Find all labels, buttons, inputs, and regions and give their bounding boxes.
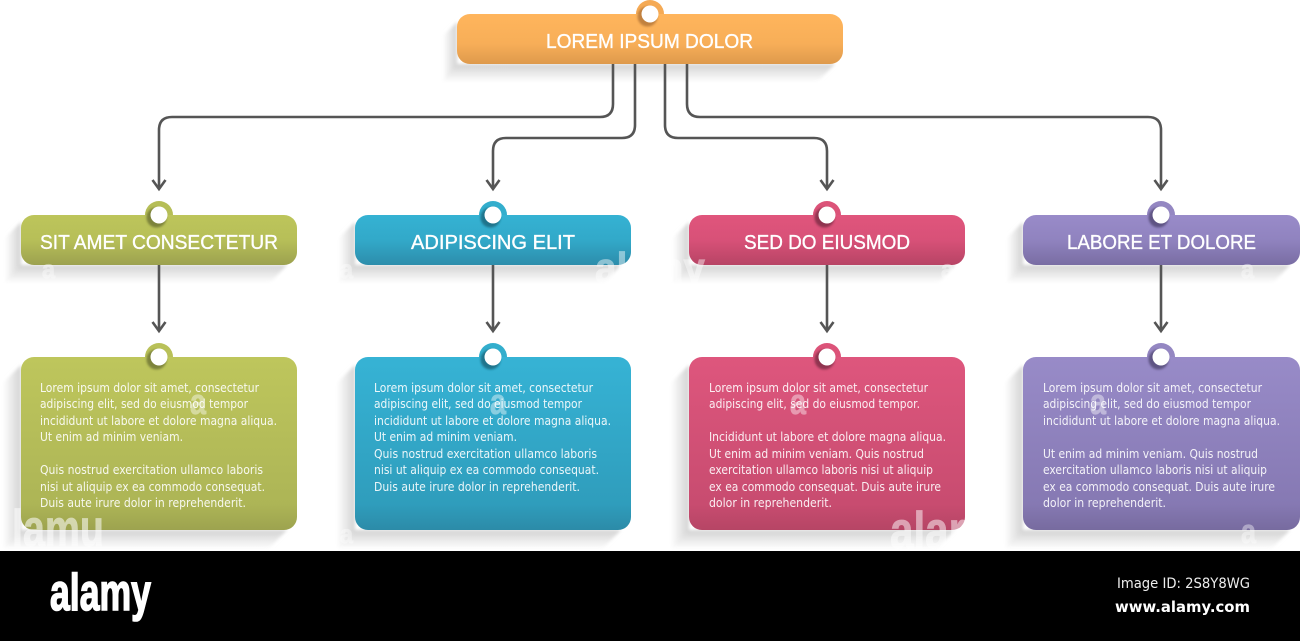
icon: pin purple body: [1148, 348, 1170, 370]
text: blue body: Lorem ipsum dolor sit amet, consectetur: [374, 381, 593, 395]
text: green body: [40, 381, 277, 510]
watermark overlay: a: [1241, 254, 1254, 284]
text: blue body: adipiscing elit, sed do eiusmod tempor: [374, 397, 582, 411]
footer logo: alamy: [50, 564, 151, 622]
text: blue body: [374, 381, 611, 494]
watermark overlay: alamy: [595, 244, 706, 291]
text: purple body: Ut enim ad minim veniam. Quis nostrud: [1043, 447, 1258, 461]
text: green body: Lorem ipsum dolor sit amet, consectetur: [40, 381, 259, 395]
image id: Image ID: 2S8Y8WG: [1117, 576, 1250, 592]
watermark overlay: lamu: [12, 500, 104, 558]
text: purple body: incididunt ut labore et dolore magna aliqua.: [1043, 414, 1280, 428]
heading: green: SIT AMET CONSECTETUR: [40, 232, 278, 254]
watermark overlay: a: [1241, 513, 1257, 551]
icon: pin green: [146, 206, 168, 228]
panel: body blue: [336, 343, 631, 549]
text: pink body: Incididunt ut labore et dolore magna aliqua.: [709, 430, 946, 444]
panel: body purple: [1004, 343, 1300, 549]
text: blue body: incididunt ut labore et dolore magna aliqua.: [374, 414, 611, 428]
arrow: to second column: [486, 64, 635, 189]
heading: pink: SED DO EIUSMOD: [744, 232, 910, 254]
text: green body: Duis aute irure dolor in reprehenderit.: [40, 496, 246, 510]
text: pink body: adipiscing elit, sed do eiusmod tempor.: [709, 397, 920, 411]
website: www.alamy.com: [1115, 598, 1250, 616]
watermark overlay: a: [340, 519, 353, 549]
arrow: to first column: [152, 64, 613, 189]
text: blue body: Quis nostrud exercitation ullamco laboris: [374, 447, 597, 461]
watermark overlay: a: [941, 254, 954, 284]
panel: header pink: [671, 201, 965, 283]
watermark overlay: a: [1090, 381, 1107, 422]
watermark overlay: a: [190, 381, 207, 422]
text: purple body: dolor in reprehenderit.: [1043, 496, 1166, 510]
arrow: blue header to body: [486, 265, 500, 331]
text: purple body: exercitation ullamco laboris nisi ut aliquip: [1043, 463, 1267, 477]
text: pink body: ex ea commodo consequat. Duis aute irure: [709, 480, 941, 494]
icon: top pin: [638, 6, 658, 26]
arrow: pink header to body: [820, 265, 834, 331]
watermark overlay: alar: [890, 502, 965, 560]
heading: purple: LABORE ET DOLORE: [1067, 232, 1256, 254]
heading: blue: ADIPISCING ELIT: [411, 232, 575, 254]
text: pink body: Ut enim ad minim veniam. Quis nostrud: [709, 447, 924, 461]
text: pink body: exercitation ullamco laboris nisi ut aliquip: [709, 463, 933, 477]
text: pink body: [709, 381, 946, 510]
text: blue body: Ut enim ad minim veniam.: [374, 430, 517, 444]
watermark overlay: a: [42, 254, 55, 284]
text: green body: incididunt ut labore et dolore magna aliqua.: [40, 414, 277, 428]
arrow: purple header to body: [1154, 265, 1168, 331]
text: green body: nisi ut aliquip ex ea commodo consequat.: [40, 480, 265, 494]
text: blue body: nisi ut aliquip ex ea commodo consequat.: [374, 463, 599, 477]
arrow: to fourth column: [687, 64, 1168, 189]
text: blue body: Duis aute irure dolor in reprehenderit.: [374, 480, 580, 494]
icon: pin blue body: [480, 348, 502, 370]
text: purple body: [1043, 381, 1280, 510]
icon: pin purple: [1148, 206, 1170, 228]
watermark overlay: a: [490, 381, 507, 422]
text: purple body: ex ea commodo consequat. Duis aute irure: [1043, 480, 1275, 494]
watermark overlay: a: [790, 381, 807, 422]
text: green body: Quis nostrud exercitation ullamco laboris: [40, 463, 263, 477]
text: purple body: adipiscing elit, sed do eiusmod tempor: [1043, 397, 1251, 411]
panel: body green: [2, 343, 297, 549]
panel: body pink: [670, 343, 965, 549]
heading: top box: LOREM IPSUM DOLOR: [546, 31, 753, 53]
text: pink body: Lorem ipsum dolor sit amet, consectetur: [709, 381, 928, 395]
panel: header purple: [1005, 201, 1300, 283]
icon: pin blue: [480, 206, 502, 228]
watermark overlay: [12, 244, 1257, 560]
text: pink body: dolor in reprehenderit.: [709, 496, 832, 510]
icon: pin green body: [146, 348, 168, 370]
panel: header green: [3, 201, 297, 283]
panel: header blue: [337, 201, 631, 283]
panel: top box: [441, 0, 843, 82]
text: green body: Ut enim ad minim veniam.: [40, 430, 183, 444]
footer band: [0, 551, 1300, 641]
icon: pin pink: [814, 206, 836, 228]
text: purple body: Lorem ipsum dolor sit amet, consectetur: [1043, 381, 1262, 395]
text: green body: adipiscing elit, sed do eiusmod tempor: [40, 397, 248, 411]
watermark overlay: a: [340, 254, 353, 284]
arrow: green header to body: [152, 265, 166, 331]
icon: pin pink body: [814, 348, 836, 370]
arrow: to third column: [665, 64, 834, 189]
